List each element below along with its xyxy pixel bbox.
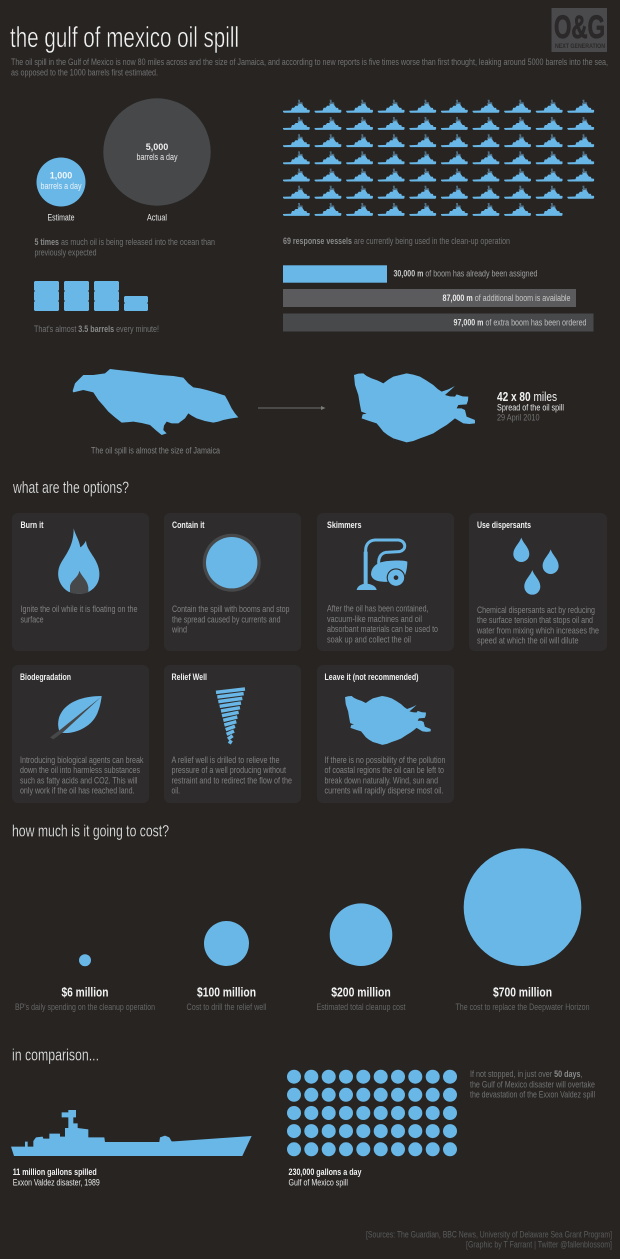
estimate circle: 1,000 (50, 170, 72, 180)
text: A relief well is drilled to relieve the (172, 755, 280, 765)
text: of coastal regions the oil can be left to (324, 765, 444, 775)
panel: Biodegradation: Biodegradation (20, 672, 71, 682)
intro paragraph (11, 57, 608, 78)
heading: comparison: in comparison... (12, 1046, 99, 1064)
panel: Leave it (317, 665, 454, 803)
estimate circle (36, 158, 86, 206)
spread stats (497, 390, 564, 422)
text: oil. (172, 786, 180, 796)
bar: 87,000 m: 87,000 m of additional boom is available (442, 293, 570, 303)
text: wind (171, 624, 187, 634)
spread stats: Spread of the oil spill (497, 402, 564, 412)
actual circle: 5,000 (146, 142, 168, 152)
panel: Skimmers: Skimmers (327, 520, 362, 530)
text: soak up and collect the oil (327, 634, 411, 644)
text (476, 605, 599, 646)
text: restraint and to redirect the flow of the (172, 776, 292, 786)
text: Gulf spill: Gulf of Mexico spill (288, 1178, 348, 1188)
$100 million: Cost to drill the relief well (186, 1002, 266, 1012)
bar: 97,000 m: 97,000 m of extra boom has been ordered (454, 318, 586, 328)
label: actual: Actual (147, 212, 167, 222)
text: Gulf spill: 230,000 gallons a day (288, 1167, 362, 1177)
icon: spill shape (345, 696, 431, 745)
text: only work if the oil has reached land. (20, 786, 134, 796)
intro paragraph: as opposed to the 1000 barrels first estimated. (11, 68, 158, 78)
$200 million (316, 903, 406, 1012)
panel: Leave it: Leave it (not recommended) (324, 672, 418, 682)
text (172, 755, 292, 796)
panel: Use dispersants: Use dispersants (477, 520, 531, 530)
heading: cost: how much is it going to cost? (12, 822, 169, 840)
text: 69 response vessels: 69 response vessels are currently being used in the clean-up operation (283, 236, 510, 246)
panel: Relief Well (164, 665, 301, 803)
text: Contain the spill with booms and stop (172, 604, 290, 614)
icon: barrels (34, 281, 148, 311)
$200 million: Estimated total cleanup cost (316, 1002, 406, 1012)
logo: O&G Next Generation: NEXT GENERATION (555, 43, 605, 50)
text: Introducing biological agents can break (20, 755, 144, 765)
text: absorbant materials can be used to (327, 624, 438, 634)
label: estimate: Estimate (48, 212, 74, 222)
spread stats: 42 x 80 miles (497, 390, 557, 404)
text: 5 times (34, 237, 215, 258)
spread stats: 29 April 2010 (497, 412, 540, 422)
$6 million (15, 954, 155, 1012)
$6 million: BP's daily spending on the cleanup operation (15, 1002, 155, 1012)
icon: flame (58, 528, 99, 594)
panel: Contain it (164, 513, 301, 651)
logo: O&G Next Generation (552, 8, 607, 52)
icon: drops (513, 538, 559, 595)
chart: dots gulf spill (287, 1070, 457, 1156)
text: currents will rapidly disperse most oil. (324, 786, 444, 796)
text: the spread caused by currents and (172, 614, 280, 624)
text: After the oil has been contained, (327, 604, 428, 614)
panel: Skimmers (317, 513, 454, 651)
text: Exxon Valdez (13, 1167, 100, 1188)
callout: 50 days (470, 1069, 595, 1100)
bar chart: boom (283, 265, 594, 332)
panel: Burn it (12, 513, 149, 651)
icon grid: 69 response vessels (283, 100, 594, 216)
$700 million: $700 million (493, 986, 552, 1000)
text: 5 times: previously expected (34, 248, 96, 258)
actual circle: barrels a day (136, 152, 178, 162)
$200 million: $200 million (331, 986, 391, 1000)
$100 million: $100 million (197, 986, 256, 1000)
bar: 87,000 m (283, 289, 576, 307)
icon: leaf (50, 696, 102, 739)
text (324, 755, 446, 796)
icon: vacuum (357, 540, 407, 590)
chart: cost circles (15, 848, 590, 1012)
heading: options: what are the options? (12, 479, 129, 497)
text (171, 604, 290, 634)
title: the gulf of mexico oil spill (10, 22, 239, 54)
icon: tanker ship (11, 1110, 252, 1156)
text: such as fatty acids and CO2. This will (20, 776, 138, 786)
panel: Contain it: Contain it (172, 520, 204, 530)
$700 million (456, 848, 590, 1012)
text: 3.5 barrels: That's almost 3.5 barrels every minute! (34, 324, 159, 334)
arrow (258, 406, 326, 410)
text: vacuum-like machines and oil (327, 614, 422, 624)
text: Gulf spill (288, 1167, 362, 1188)
map: Jamaica (73, 369, 238, 435)
bar: 30,000 m: 30,000 m of boom has already been assigned (394, 268, 538, 278)
bar: 30,000 m (283, 265, 538, 283)
text (20, 604, 138, 624)
bar: 97,000 m (283, 314, 594, 332)
text: the surface tension that stops oil and (477, 615, 593, 625)
text (327, 604, 438, 644)
panel: Burn it: Burn it (20, 520, 44, 530)
text (20, 755, 144, 796)
$100 million (186, 921, 266, 1012)
$6 million: $6 million (62, 986, 108, 1000)
caption: Jamaica: The oil spill is almost the size of Jamaica (91, 446, 220, 456)
icon: drill (216, 689, 245, 744)
text: surface (20, 614, 44, 624)
panel: Relief Well: Relief Well (172, 672, 207, 682)
text: down the oil into harmless substances (20, 765, 140, 775)
estimate circle: barrels a day (40, 181, 82, 191)
panel: Biodegradation (12, 665, 149, 803)
text: pressure of a well producing without (172, 765, 286, 775)
sources (366, 1230, 612, 1250)
text: Ignite the oil while it is floating on the (20, 604, 138, 614)
chart: estimate vs actual barrels a day (36, 98, 211, 222)
text: 5 times: 5 times as much oil is being released into the ocean than (34, 237, 215, 247)
icon: contained circle (203, 534, 261, 592)
actual circle (103, 98, 211, 206)
text: Exxon Valdez: Exxon Valdez disaster, 1989 (13, 1178, 100, 1188)
text: Exxon Valdez: 11 million gallons spilled (13, 1167, 97, 1177)
text: break down naturally. Wind, sun and (324, 776, 438, 786)
text: speed at which the oil will dilute (477, 636, 578, 646)
callout: 50 days: If not stopped, in just over 50 days, (470, 1069, 582, 1079)
panel: Use dispersants (469, 513, 607, 651)
map: oil spill (354, 373, 475, 442)
text: If there is no possibility of the pollution (324, 755, 446, 765)
